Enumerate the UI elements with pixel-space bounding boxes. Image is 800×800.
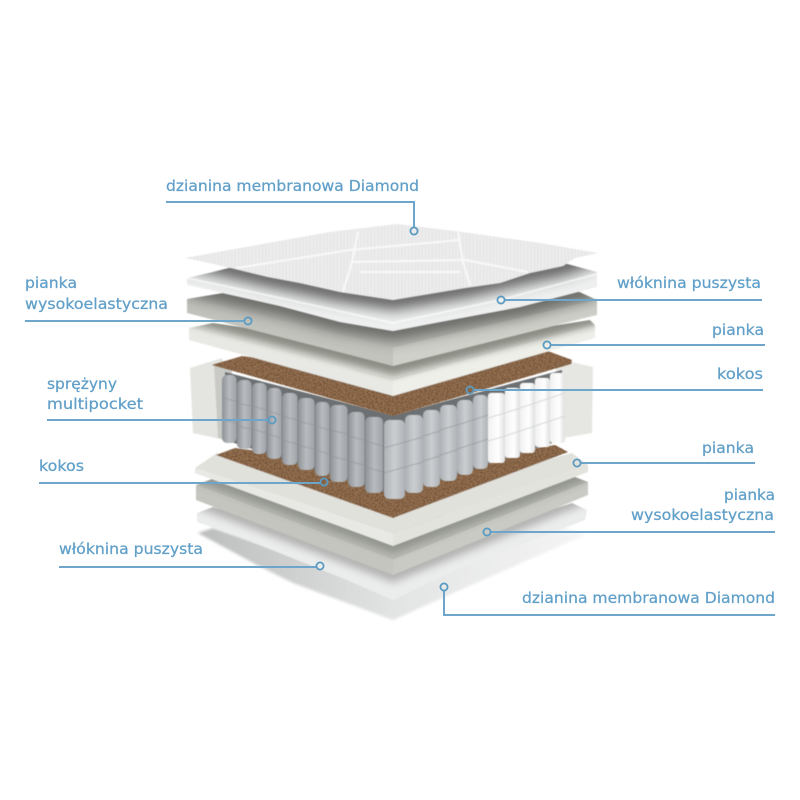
layer: top coconut coir (212, 350, 572, 416)
callout: sprężyny multipocket: multipocket (47, 395, 143, 413)
callout: pianka (upper right) (543, 321, 765, 349)
callout: pianka wysokoelastyczna (left): wysokoelastyczna (25, 295, 168, 313)
callout: pianka wysokoelastyczna (right) (483, 486, 775, 536)
callout: kokos (right): kokos (717, 365, 763, 383)
callout: pianka wysokoelastyczna (right): wysokoelastyczna (631, 506, 774, 524)
pocket springs block (222, 370, 565, 499)
callout: włóknina puszysta (left): włóknina puszysta (59, 540, 203, 558)
springs: left row (222, 375, 383, 493)
callout: dzianina membranowa Diamond (bottom) (440, 583, 775, 615)
layer: bottom coconut coir (216, 445, 568, 518)
spring coil folds (222, 398, 488, 473)
callout: pianka (upper right): pianka (712, 321, 764, 339)
callout: dzianina membranowa Diamond (bottom): dzianina membranowa Diamond (522, 589, 775, 607)
layer: top high-elastic foam (187, 285, 597, 366)
side foam frame (190, 358, 593, 441)
layer: bottom diamond knit (198, 527, 585, 620)
callout: włóknina puszysta (right) (497, 274, 762, 304)
layer: bottom high-elastic foam (195, 472, 588, 575)
callout: włóknina puszysta (right): włóknina puszysta (617, 274, 761, 292)
callout: dzianina membranowa Diamond (top) (166, 177, 419, 235)
callout: pianka (lower right) (573, 439, 755, 467)
callout: kokos (right) (466, 365, 763, 394)
callout: kokos (left) (39, 457, 328, 486)
infographic: mattress cross-section (25, 179, 775, 620)
callout: dzianina membranowa Diamond (top): dzianina membranowa Diamond (166, 177, 419, 195)
callout: pianka wysokoelastyczna (right): pianka (724, 486, 775, 504)
callout: sprężyny multipocket (47, 375, 276, 424)
bottom layers stack (195, 445, 588, 620)
layer: top diamond knit (185, 224, 598, 300)
callout: pianka wysokoelastyczna (left) (25, 274, 252, 325)
callout: włóknina puszysta (left) (59, 540, 324, 570)
callout: pianka (lower right): pianka (702, 439, 754, 457)
callout: pianka wysokoelastyczna (left): pianka (25, 274, 77, 292)
springs: right white row (488, 373, 565, 463)
callout: sprężyny multipocket: sprężyny (47, 375, 117, 393)
layer: bottom fibre fleece (196, 495, 588, 600)
layer: top foam (187, 313, 597, 396)
layer: top fibre fleece (187, 263, 598, 332)
layer: bottom foam (195, 453, 588, 546)
callout: kokos (left): kokos (39, 457, 84, 475)
upper layers stack (185, 224, 598, 416)
springs: right grey row (384, 395, 488, 499)
